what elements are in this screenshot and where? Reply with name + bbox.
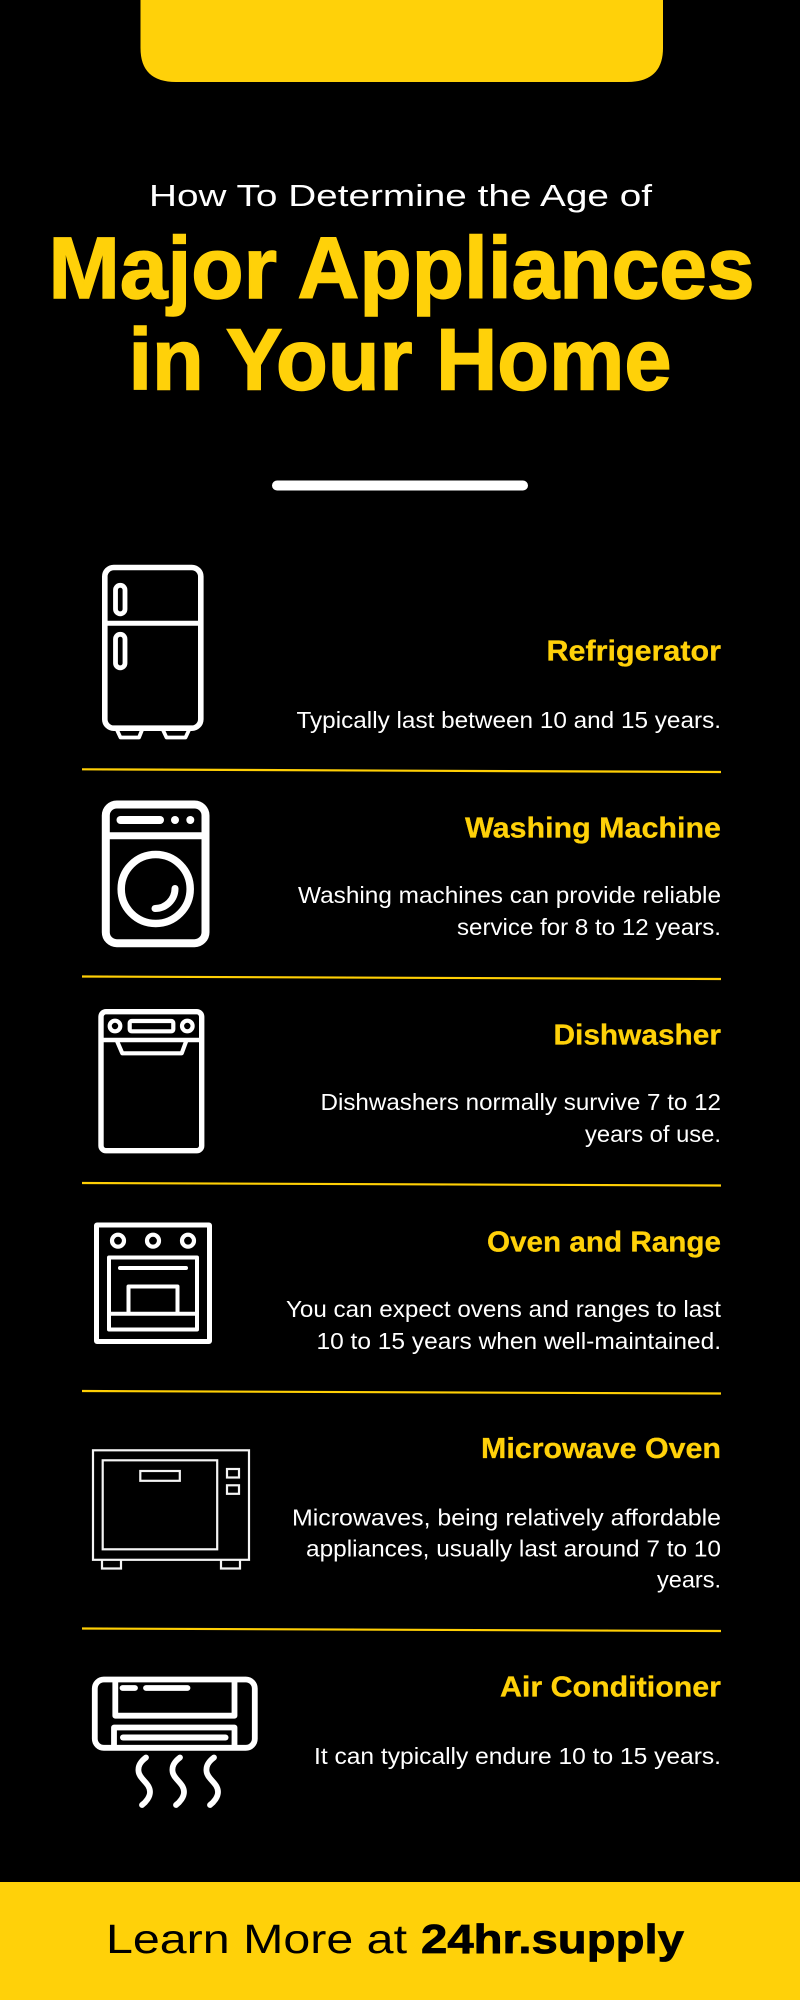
divider <box>82 1628 721 1631</box>
heading: Refrigerator <box>546 636 721 668</box>
icon: washing machine <box>106 804 206 943</box>
title: in Your Home <box>128 312 672 408</box>
description <box>286 1296 721 1354</box>
footer text: 24hr.supply <box>421 1916 684 1962</box>
description: appliances, usually last around 7 to 10 <box>306 1536 721 1562</box>
heading: Washing Machine <box>465 813 721 845</box>
divider <box>82 1391 721 1394</box>
description: Microwaves, being relatively affordable <box>292 1504 721 1530</box>
footer band <box>0 1882 800 2000</box>
panel: dishwasher <box>101 1012 721 1151</box>
icon: air conditioner <box>95 1680 255 1805</box>
icon: refrigerator <box>105 568 201 738</box>
title <box>48 220 754 408</box>
description: It can typically endure 10 to 15 years. <box>314 1743 721 1769</box>
divider <box>82 1183 721 1186</box>
heading: Microwave Oven <box>481 1433 721 1465</box>
footer text <box>106 1916 684 1962</box>
description <box>320 1089 721 1147</box>
panel: washing machine <box>106 804 721 943</box>
description: Dishwashers normally survive 7 to 12 <box>320 1089 721 1115</box>
divider <box>82 769 721 772</box>
description: service for 8 to 12 years. <box>457 914 721 940</box>
description: Typically last between 10 and 15 years. <box>296 707 721 733</box>
description: You can expect ovens and ranges to last <box>286 1296 721 1322</box>
panel: air conditioner <box>95 1672 721 1805</box>
heading: Oven and Range <box>487 1226 721 1258</box>
heading: Air Conditioner <box>500 1672 721 1704</box>
icon: oven <box>96 1225 210 1342</box>
footer text: Learn More at <box>106 1916 408 1962</box>
title: Major Appliances <box>48 220 754 317</box>
description: Washing machines can provide reliable <box>298 882 721 908</box>
description <box>298 882 721 940</box>
divider <box>82 976 721 979</box>
panel: refrigerator <box>105 568 721 738</box>
subtitle: How To Determine the Age of <box>149 178 652 213</box>
description <box>292 1504 721 1592</box>
icon: microwave <box>93 1450 249 1568</box>
header block <box>48 178 754 490</box>
panel: microwave oven <box>93 1433 721 1592</box>
description: 10 to 15 years when well-maintained. <box>316 1328 721 1354</box>
panel: oven and range <box>96 1225 721 1354</box>
description: years. <box>657 1566 721 1592</box>
description: years of use. <box>585 1121 721 1147</box>
white accent bar <box>272 480 528 490</box>
icon: dishwasher <box>101 1012 202 1151</box>
top yellow tab <box>140 0 663 82</box>
heading: Dishwasher <box>554 1020 721 1052</box>
